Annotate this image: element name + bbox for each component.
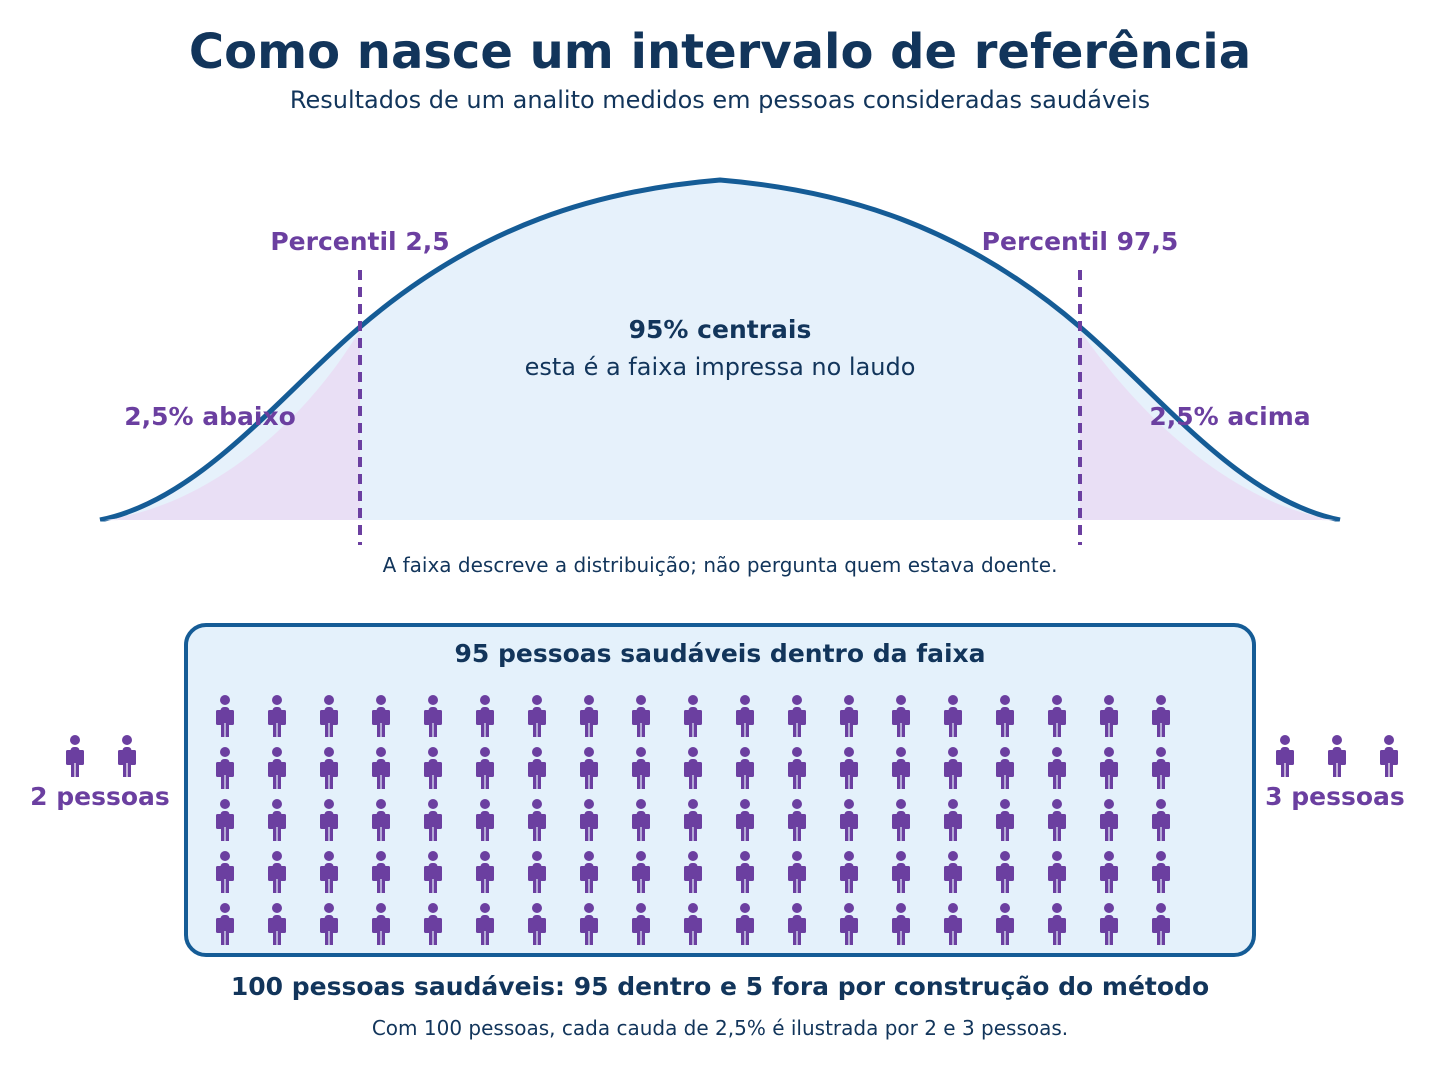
label: 3 people: 3 pessoas: [1265, 782, 1405, 811]
group: 3 people above the range: [1265, 735, 1405, 811]
group: 2 people below the range: [30, 735, 170, 811]
icon: person: [1276, 735, 1294, 777]
icon: person: [118, 735, 136, 777]
lower tail shading: [100, 330, 360, 520]
chart note: A faixa descreve a distribuição; não pergunta quem estava doente.: [383, 553, 1057, 577]
label: upper tail: 2,5% acima: [1149, 402, 1311, 431]
percentile 97.5 line: [1078, 270, 1082, 545]
title: Como nasce um intervalo de referência: [189, 24, 1251, 80]
panel heading: 95 pessoas saudáveis dentro da faixa: [454, 639, 986, 668]
icon: person: [66, 735, 84, 777]
upper tail shading: [1080, 330, 1340, 520]
label: lower tail: 2,5% abaixo: [124, 402, 296, 431]
percentile 2.5 line: [358, 270, 362, 545]
label: central 95 percent: 95% centrais: [629, 315, 811, 344]
panel box: [186, 625, 1254, 955]
pictogram: 95 people: [216, 695, 1170, 945]
chart: distribution curve: [98, 180, 1342, 545]
left curve tip: [98, 522, 1342, 525]
panel: inside the range: [186, 625, 1254, 955]
icon: person: [1380, 735, 1398, 777]
label: percentile 97.5: Percentil 97,5: [982, 227, 1178, 256]
distribution curve line: [100, 180, 1340, 520]
summary heading: 100 pessoas saudáveis: 95 dentro e 5 fora por construção do método: [231, 972, 1209, 1001]
label: percentile 2.5: Percentil 2,5: [270, 227, 450, 256]
label: 2 people: 2 pessoas: [30, 782, 170, 811]
icon: person: [1328, 735, 1346, 777]
tip wedges: [104, 518, 1336, 520]
summary note: Com 100 pessoas, cada cauda de 2,5% é ilustrada por 2 e 3 pessoas.: [372, 1016, 1068, 1040]
subtitle: Resultados de um analito medidos em pessoas consideradas saudáveis: [290, 86, 1150, 114]
curve area fill: [100, 180, 1340, 520]
label: printed range: esta é a faixa impressa no laudo: [525, 353, 915, 381]
